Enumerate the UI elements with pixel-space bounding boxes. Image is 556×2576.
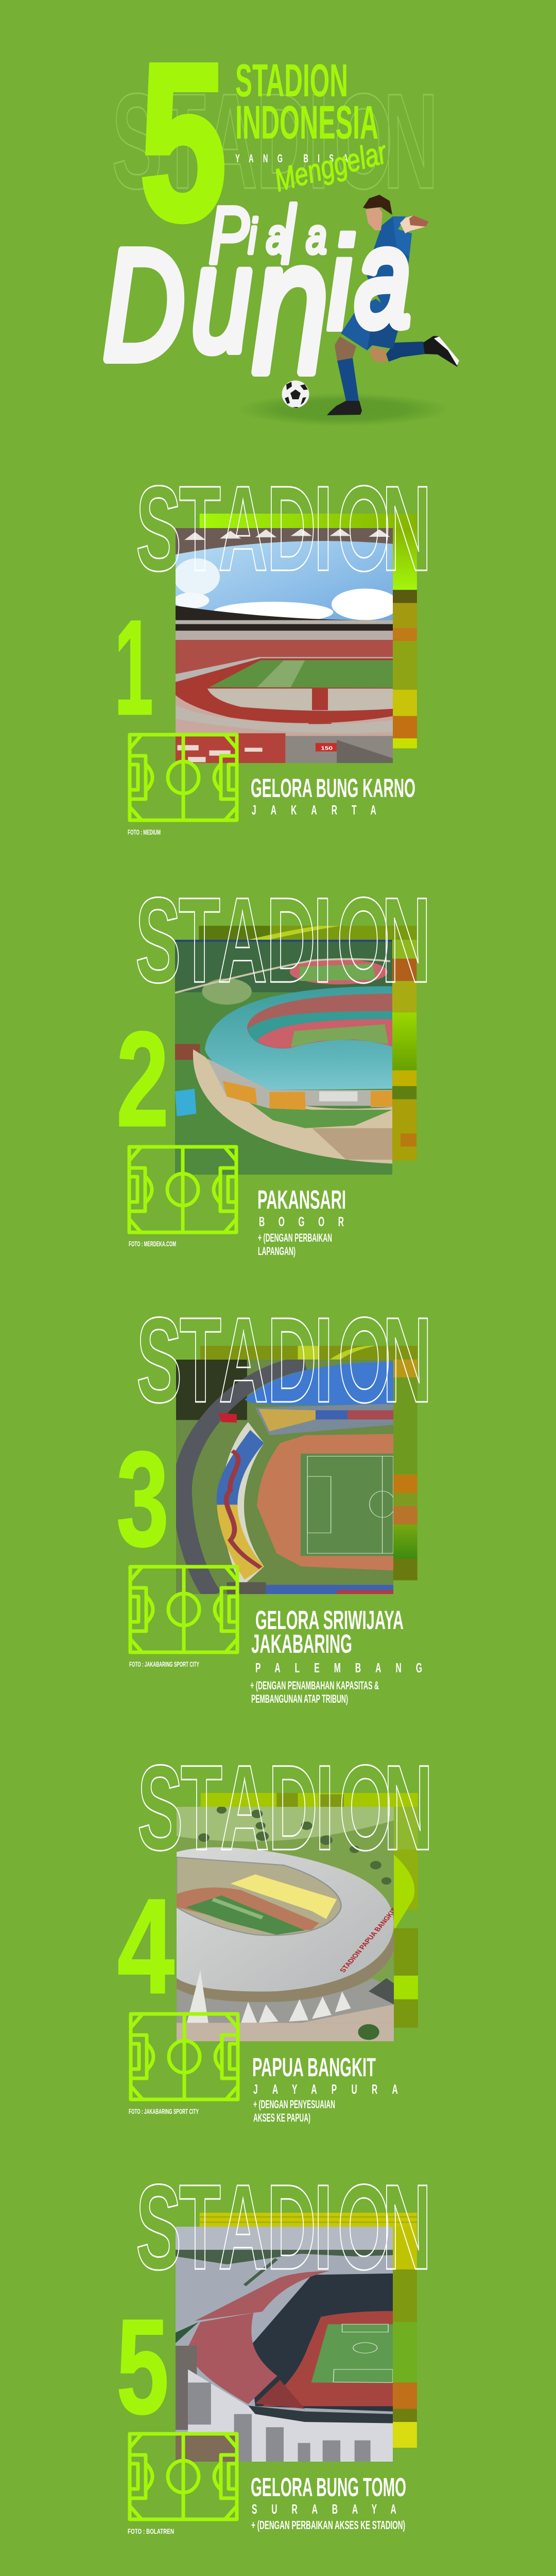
photo credit: FOTO : JAKABARING SPORT CITY	[129, 1660, 199, 1668]
script word Dunia: Dunia	[103, 200, 411, 413]
photo credit: FOTO : JAKABARING SPORT CITY	[129, 2107, 199, 2115]
photo credit: FOTO : MEDIUM	[128, 828, 161, 836]
icon: football pitch	[130, 735, 237, 820]
stadium photo	[177, 1807, 398, 2041]
outlined word STADION: STADION	[136, 2159, 431, 2295]
stadium name: JAKABARING	[251, 1629, 352, 1658]
note: + (DENGAN PENAMBAHAN KAPASITAS &	[250, 1679, 379, 1692]
city: PALEMBANG	[255, 1660, 422, 1675]
stadium photo: STADION PAPUA BANGKIT	[338, 1907, 398, 1974]
panel: stadium 5 Gelora Bung Tomo	[116, 2159, 431, 2535]
note: + (DENGAN PERBAIKAN AKSES KE STADION)	[251, 2518, 405, 2532]
panel: hero title	[103, 18, 459, 426]
football	[282, 380, 309, 408]
stadium photo: 150	[321, 745, 333, 751]
outlined word STADION: STADION	[136, 1292, 432, 1428]
note: AKSES KE PAPUA)	[253, 2111, 310, 2124]
stadium photo	[176, 528, 393, 763]
number 3: 3	[116, 1423, 169, 1574]
number 5: 5	[116, 2291, 169, 2442]
city: JAYAPURA	[253, 2082, 398, 2097]
note: + (DENGAN PERBAIKAN	[258, 1231, 332, 1244]
panel: stadium 1 Gelora Bung Karno	[114, 461, 431, 836]
note	[250, 1679, 379, 1705]
stadium photo	[176, 2227, 393, 2462]
outlined word STADION: STADION	[136, 461, 431, 596]
stadium photo	[176, 1360, 393, 1594]
script word Menggelar: Menggelar	[271, 134, 391, 199]
outlined word STADION: STADION	[137, 1740, 433, 1875]
icon: football pitch	[129, 1147, 236, 1232]
stadium name: GELORA BUNG KARNO	[251, 773, 415, 803]
note	[258, 1231, 332, 1258]
tinted back image	[200, 514, 417, 749]
note: PEMBANGUNAN ATAP TRIBUN)	[251, 1692, 348, 1705]
note	[253, 2098, 335, 2124]
photo credit: FOTO : MERDEKA.COM	[129, 1240, 176, 1248]
stadium photo	[175, 940, 392, 1175]
stadium name	[251, 1605, 404, 1658]
heading INDONESIA: INDONESIA	[235, 96, 378, 149]
subheading YANG BISA: YANG BISA	[235, 152, 348, 165]
city: SURABAYA	[252, 2502, 396, 2517]
note: + (DENGAN PENYESUAIAN	[253, 2098, 335, 2111]
city: BOGOR	[259, 1214, 344, 1229]
icon: football pitch	[131, 2014, 238, 2099]
panel: stadium 4 Papua Bangkit	[117, 1740, 433, 2124]
number 1: 1	[114, 592, 153, 743]
soccer player	[327, 195, 459, 415]
tinted back image	[201, 1793, 418, 2028]
photo credit: FOTO : BOLATREN	[128, 2527, 174, 2535]
stadium name: PAPUA BANGKIT	[252, 2053, 376, 2082]
icon: football pitch	[130, 1567, 237, 1652]
number 4: 4	[117, 1871, 175, 2022]
shadow on ground	[238, 393, 449, 426]
ghost outlined word STADION: STADION	[112, 66, 438, 217]
outlined word STADION: STADION	[135, 872, 431, 1008]
panel: stadium 2 Pakansari	[116, 872, 431, 1258]
script word Piala: Piala	[208, 189, 326, 281]
tinted back image	[199, 926, 416, 1161]
city: JAKARTA	[252, 803, 376, 818]
stadium name: PAKANSARI	[257, 1185, 346, 1214]
note: LAPANGAN)	[258, 1245, 296, 1258]
panel: stadium 3 Gelora Sriwijaya Jakabaring	[116, 1292, 432, 1705]
tinted back image	[200, 1346, 418, 1580]
stadium name: GELORA BUNG TOMO	[251, 2472, 406, 2502]
heading STADION: STADION	[235, 55, 348, 107]
number 2: 2	[116, 1003, 169, 1155]
stadium name: GELORA SRIWIJAYA	[255, 1605, 404, 1635]
big numeral 5: 5	[140, 18, 226, 266]
icon: football pitch	[130, 2434, 237, 2519]
tinted back image	[200, 2213, 417, 2448]
